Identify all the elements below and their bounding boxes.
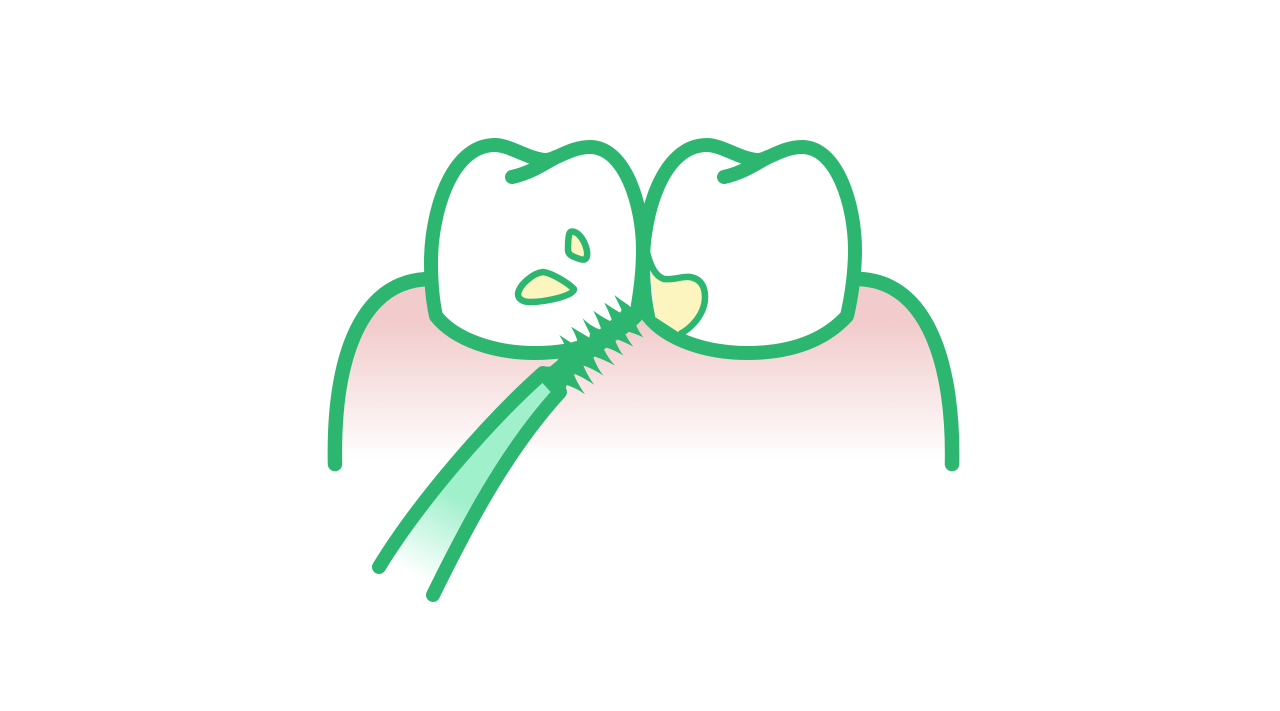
gum outline left bbox=[335, 279, 431, 464]
brush head stem and bristles bbox=[540, 295, 643, 397]
plaque outline bbox=[646, 248, 705, 334]
gum outline right bbox=[856, 279, 952, 464]
brush handle fill bbox=[379, 373, 560, 595]
gum fill bbox=[335, 279, 952, 464]
left tooth crease bbox=[512, 157, 556, 177]
plaque spot: small bbox=[568, 232, 587, 260]
left tooth bbox=[431, 145, 643, 353]
brush handle outline bbox=[379, 373, 560, 595]
interdental brush bbox=[379, 295, 643, 595]
plaque between teeth bbox=[650, 258, 703, 332]
right tooth bbox=[643, 145, 855, 353]
plaque spot: large bbox=[518, 272, 574, 302]
right tooth crease bbox=[724, 157, 768, 177]
